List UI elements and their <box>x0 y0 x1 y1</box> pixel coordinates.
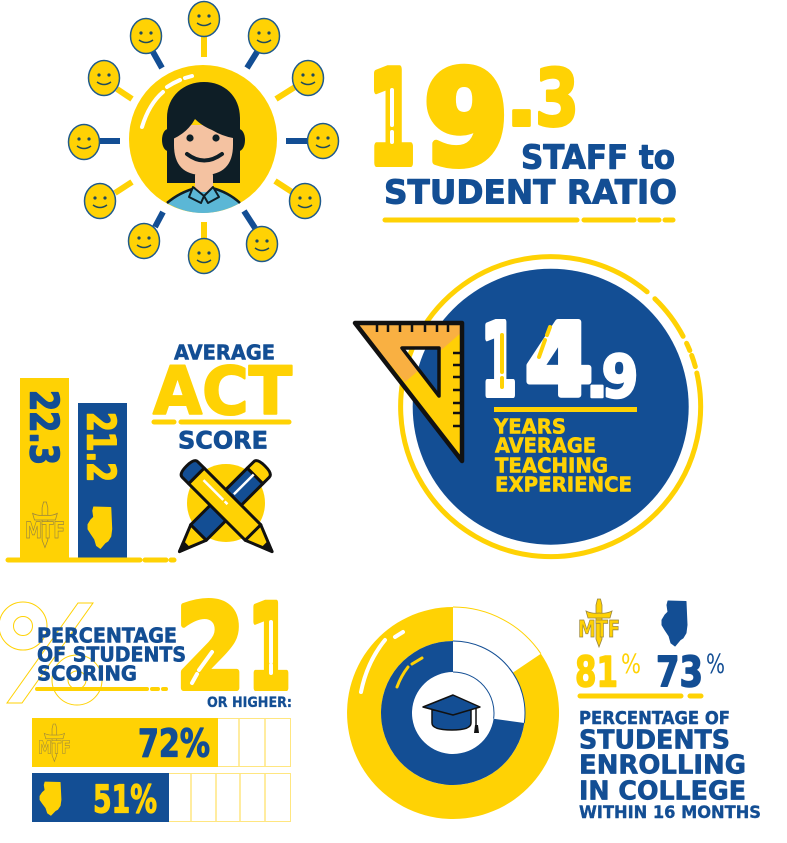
heading: staff to student ratio: STAFF to <box>521 138 675 176</box>
icon: teacher portrait <box>129 65 277 213</box>
heading: percentage of students scoring <box>37 624 186 686</box>
big number 14.9: . <box>586 342 608 411</box>
bar: Illinois 21.2: 21.2 <box>78 412 122 482</box>
heading: average ACT score: AVERAGE <box>174 341 275 365</box>
heading: percentage of students scoring: SCORING <box>37 662 137 686</box>
icon: Illinois state <box>662 601 687 646</box>
stat: Illinois 73 percent: 73 <box>656 647 703 696</box>
icon: Illinois state <box>40 782 61 815</box>
icon: MTF logo <box>38 724 71 761</box>
big number 19.3: . <box>505 54 538 144</box>
big number 19.3 <box>368 45 579 194</box>
label: or higher: OR HIGHER: <box>207 695 292 711</box>
icon: MTF logo: MTF <box>25 519 65 544</box>
panel: percentage scoring 21 or higher <box>0 579 292 822</box>
text: years average teaching experience: EXPERIENCE <box>495 473 632 497</box>
text: years average teaching experience: AVERAGE <box>495 434 596 458</box>
icon: MTF logo: MTF <box>38 738 71 759</box>
big number 14.9: 4 <box>525 302 593 419</box>
heading: staff to student ratio: STUDENT RATIO <box>384 172 677 212</box>
text: percentage of students enrolling in college: IN COLLEGE <box>579 777 746 807</box>
stat: MTF 81 percent: % <box>621 649 641 680</box>
heading: average ACT score: SCORE <box>178 427 268 455</box>
heading: average ACT score: ACT <box>153 353 292 430</box>
big number 14.9 <box>481 302 638 419</box>
text: years average teaching experience <box>493 415 632 497</box>
icon: Illinois state <box>88 507 112 548</box>
heading: percentage of students scoring: OF STUDENTS <box>37 643 186 667</box>
bar: Illinois 21.2 <box>78 403 127 559</box>
panel: staff to student ratio <box>68 2 677 274</box>
big number 14.9: 1 <box>481 302 517 419</box>
icon: smiling student faces <box>68 2 338 274</box>
bar: Illinois 51% <box>32 773 290 822</box>
heading: percentage of students scoring: PERCENTAGE <box>37 624 177 648</box>
text: percentage of students enrolling in college: PERCENTAGE OF <box>579 708 730 729</box>
panel: college enrollment <box>347 599 761 823</box>
big number 19.3: 9 <box>424 45 508 194</box>
bar: MTF 72% <box>32 718 290 767</box>
icon: MTF logo <box>578 599 620 647</box>
heading: average ACT score <box>153 341 292 455</box>
icon: graduation cap <box>423 695 480 733</box>
text: percentage of students enrolling in college <box>579 708 761 823</box>
big number 21: 2 <box>176 579 246 716</box>
icon: MTF logo: MTF <box>578 617 620 643</box>
blue circle with ring <box>401 257 701 557</box>
text: percentage of students enrolling in college: ENROLLING <box>579 751 746 781</box>
stat: Illinois 73 percent: % <box>706 649 725 680</box>
panel: average ACT score <box>8 341 292 560</box>
text: years average teaching experience: TEACHING <box>495 454 608 478</box>
big number 14.9: 9 <box>602 342 638 411</box>
spokes <box>100 37 308 240</box>
panel: teaching experience <box>355 257 701 557</box>
big number 19.3: 3 <box>535 54 579 144</box>
bar: MTF 22.3: 22.3 <box>20 390 66 465</box>
icon: crossed pencils <box>172 458 280 559</box>
icon: MTF logo <box>25 502 65 548</box>
decorative percent outline <box>0 602 102 705</box>
bar: MTF 72%: 72% <box>138 722 210 766</box>
icon: set square ruler <box>355 323 462 461</box>
text: percentage of students enrolling in college: WITHIN 16 MONTHS <box>579 803 761 823</box>
big number 19.3: 1 <box>368 45 416 194</box>
heading: staff to student ratio <box>384 138 677 212</box>
bar: MTF 22.3 <box>20 378 69 559</box>
big number 21: 1 <box>248 579 291 716</box>
icon: teacher with students <box>68 2 338 274</box>
bar: Illinois 51%: 51% <box>93 778 157 822</box>
donut chart <box>347 607 559 819</box>
text: years average teaching experience: YEARS <box>493 415 566 439</box>
stat: MTF 81 percent: 81 <box>575 647 618 696</box>
text: percentage of students enrolling in college: STUDENTS <box>579 726 730 756</box>
